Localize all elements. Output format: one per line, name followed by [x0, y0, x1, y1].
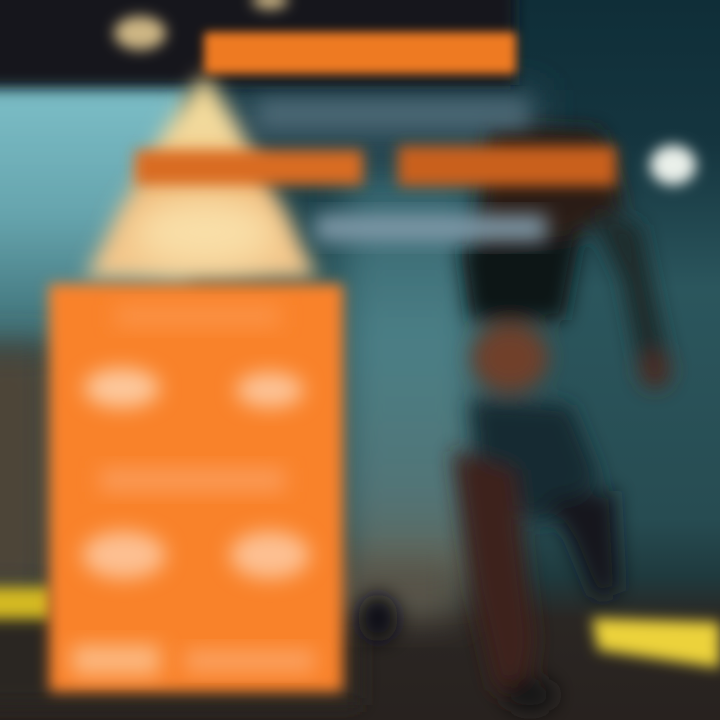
runner torso	[460, 235, 580, 320]
tagline band (illegible text)	[315, 215, 547, 241]
dark dumbbell on floor	[358, 594, 398, 642]
yellow floor stripes	[0, 587, 720, 668]
stat: top left	[84, 368, 160, 408]
footer text right	[185, 650, 315, 672]
footer text left	[72, 645, 160, 675]
stat: top right	[236, 372, 304, 408]
runner arm	[590, 210, 668, 372]
section divider label	[100, 468, 285, 492]
stat: lower left	[82, 531, 166, 579]
runner silhouette	[452, 125, 671, 713]
stat: lower right	[230, 531, 310, 579]
runner shorts	[470, 400, 600, 525]
headline, second block (illegible text)	[398, 146, 616, 186]
runner legs	[452, 450, 535, 700]
panel: orange stats	[49, 284, 343, 692]
light cone	[85, 72, 318, 278]
top banner	[204, 32, 516, 74]
ceiling lights	[114, 0, 696, 185]
headline, first block (illegible text)	[135, 150, 363, 185]
panel heading	[115, 305, 280, 327]
subtitle band (illegible text)	[258, 100, 528, 128]
runner head and shoulders	[475, 125, 625, 245]
